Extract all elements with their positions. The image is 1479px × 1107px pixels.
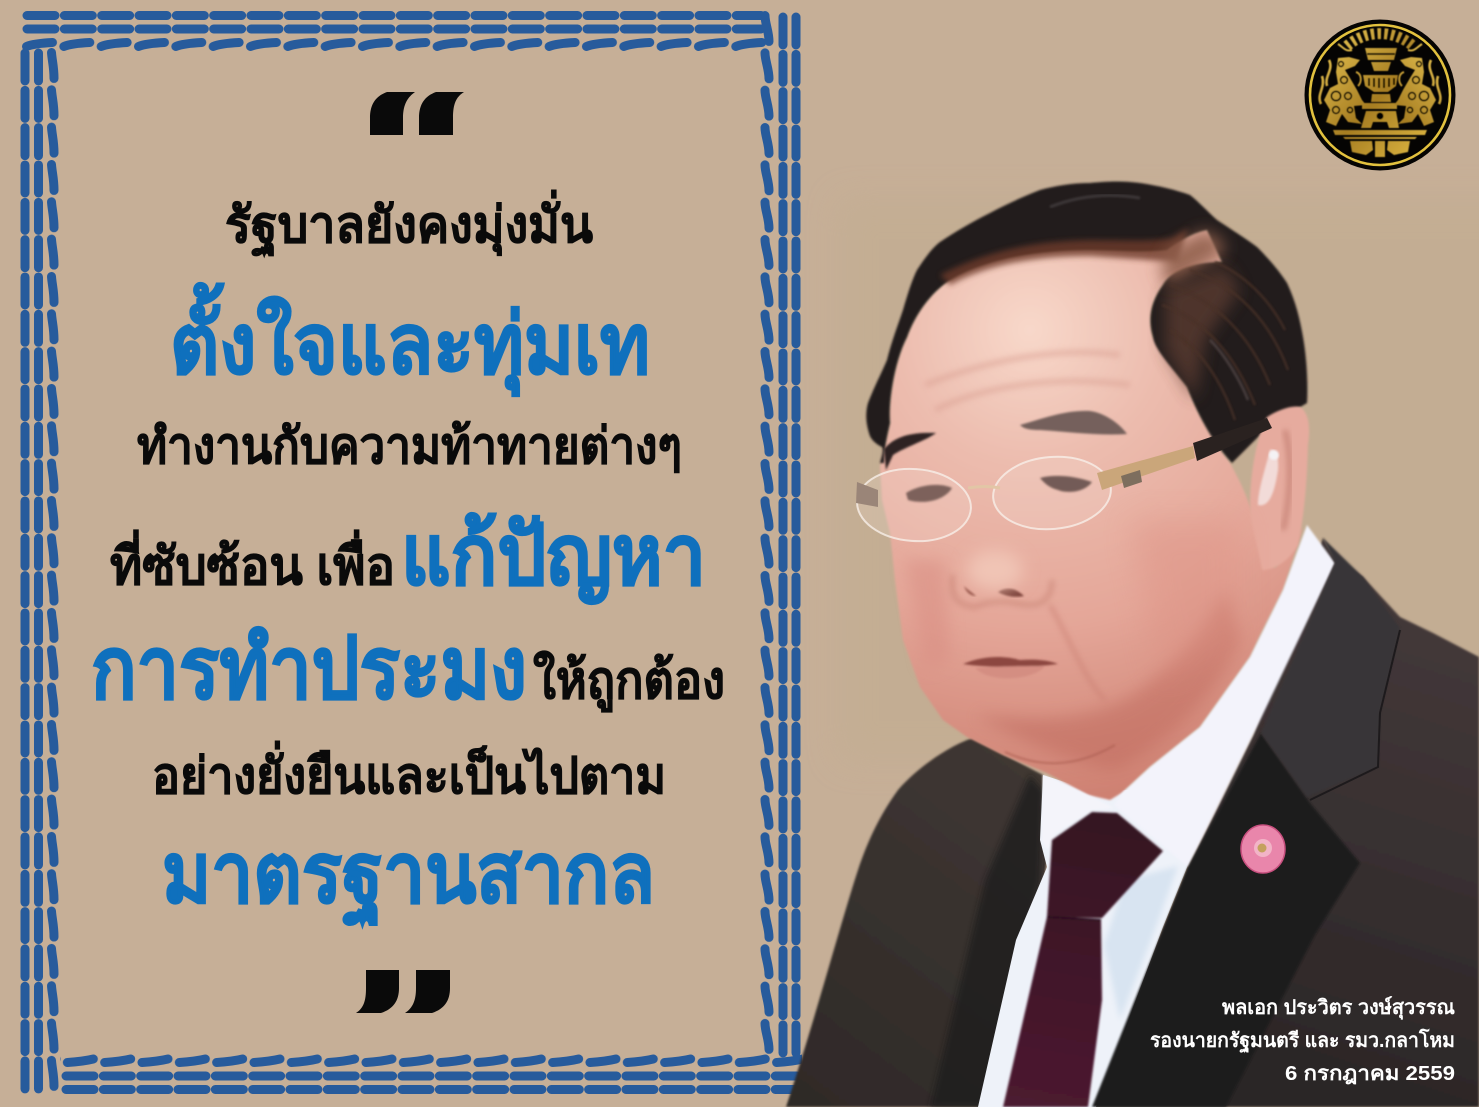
portrait: nose	[952, 550, 1052, 607]
portrait: shirt shadow	[1104, 866, 1178, 1020]
portrait: ear inner and earpiece	[1258, 430, 1290, 530]
icon: opening quotation mark	[370, 92, 464, 135]
quote line 2 highlighted: ตั้งใจและทุ่มเท	[170, 282, 650, 397]
caption: name, title and date	[1150, 996, 1455, 1085]
portrait: hair highlight	[1050, 195, 1140, 207]
portrait: left eyebrow	[884, 433, 936, 470]
portrait: thinning hair fade	[1165, 266, 1240, 400]
icon: closing quotation mark	[356, 970, 450, 1013]
portrait: right lapel	[1092, 733, 1360, 1107]
portrait: forehead wrinkles	[925, 352, 1130, 410]
portrait: eye right	[1040, 476, 1092, 492]
seal: base ornament	[1350, 141, 1410, 157]
portrait: glasses	[855, 418, 1272, 545]
portrait: man in suit and glasses	[786, 182, 1479, 1107]
seal: urn top	[1365, 48, 1397, 71]
portrait: mouth	[963, 657, 1058, 678]
seal: pedestal	[1361, 103, 1399, 128]
portrait: upper collar of jacket	[1261, 538, 1400, 797]
quote line 6: อย่างยั่งยืนและเป็นไปตาม	[152, 741, 666, 804]
quote line 3: ทำงานกับความท้าทายต่างๆ	[137, 418, 682, 474]
portrait: notch line	[1310, 630, 1400, 800]
caption: name: พลเอก ประวิตร วงษ์สุวรรณ	[1222, 996, 1455, 1020]
portrait: neck crease	[1005, 745, 1115, 763]
portrait: jaw shading	[975, 590, 1240, 770]
portrait: right eyebrow	[1020, 411, 1127, 435]
quote text block	[91, 190, 725, 928]
portrait: cheek shading left	[905, 560, 950, 670]
quote line 5 highlighted: การทำประมง	[91, 621, 527, 717]
seal: urn bowl	[1363, 75, 1398, 102]
quote line 4 highlighted: แก้ปัญหา	[401, 508, 706, 606]
portrait: jacket right	[1090, 538, 1479, 1107]
portrait: hair brown fringe	[940, 228, 1188, 285]
quote line 7 highlighted: มาตรฐานสากล	[162, 826, 655, 928]
caption: title: รองนายกรัฐมนตรี และ รมว.กลาโหม	[1150, 1028, 1455, 1054]
portrait: shirt	[978, 775, 1190, 1107]
quote line 4 start: ที่ซับซ้อน เพื่อ	[110, 530, 395, 596]
portrait: left collar	[1042, 775, 1114, 850]
portrait: nasolabial fold	[1050, 605, 1105, 700]
portrait: hair	[866, 182, 1307, 463]
icon: lapel pin	[1241, 825, 1285, 873]
portrait: jacket left	[786, 738, 1047, 1107]
portrait: parting scalp	[1160, 230, 1225, 285]
icon: government seal	[1304, 20, 1456, 170]
seal: base bars	[1333, 130, 1427, 139]
portrait: jacket left fold	[930, 775, 1043, 1107]
seal: left lion	[1320, 44, 1366, 126]
quote line 5 end: ให้ถูกต้อง	[533, 650, 725, 713]
portrait: necktie	[1003, 812, 1163, 1107]
portrait: eye left	[906, 485, 952, 502]
portrait: right collar	[1114, 525, 1335, 867]
portrait: neck and face	[880, 230, 1303, 800]
seal: flames	[1347, 34, 1413, 46]
quote line 1: รัฐบาลยังคงมุ่งมั่น	[225, 190, 593, 257]
portrait: hair strands	[1162, 262, 1288, 420]
portrait: ear	[1250, 407, 1309, 570]
portrait: cheek shading right	[1130, 520, 1240, 680]
caption: date: 6 กรกฎาคม 2559	[1285, 1063, 1455, 1085]
panel: blue brush-stroke frame	[20, 10, 802, 1092]
seal: right lion	[1394, 44, 1440, 126]
